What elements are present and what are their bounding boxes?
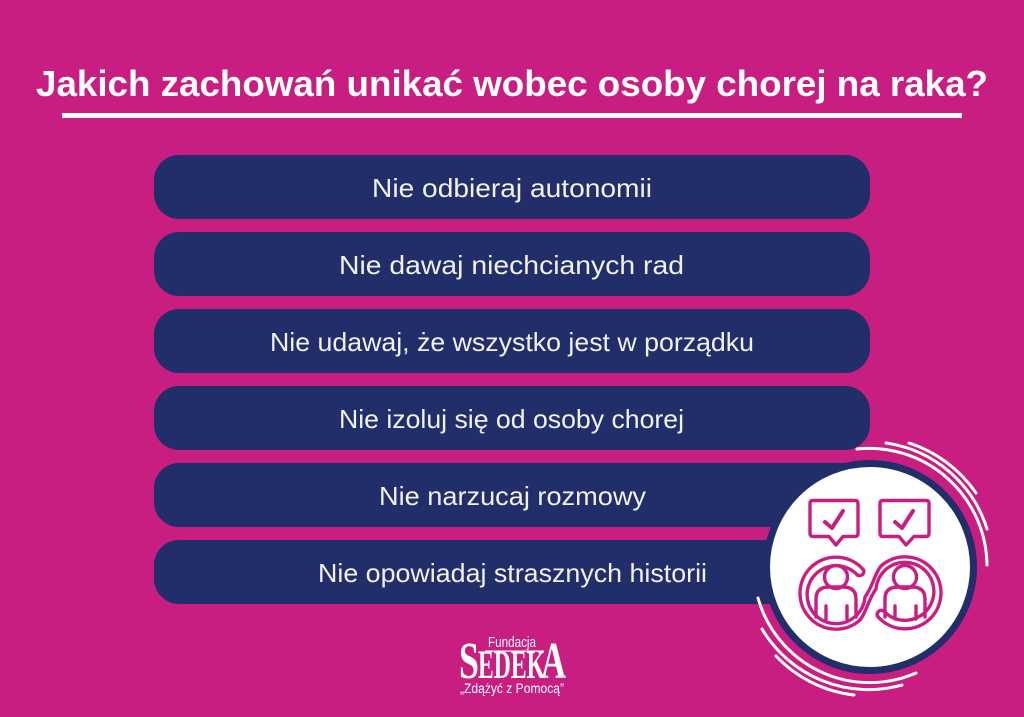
list item 1: Nie odbieraj autonomii [372, 173, 652, 203]
logo: Fundacja Sedeka: S [459, 633, 479, 690]
icon: right person [885, 566, 925, 619]
list item 3 [154, 309, 870, 373]
list item 1 [154, 155, 870, 219]
decorative swoosh arcs [758, 443, 987, 695]
icon badge circle [766, 464, 974, 670]
list item 5 [154, 463, 870, 527]
logo: Fundacja Sedeka: A [541, 633, 566, 690]
logo: Fundacja Sedeka: Fundacja [488, 634, 537, 651]
icon: two people with check speech bubbles [800, 500, 941, 629]
logo: Fundacja Sedeka: „Zdążyć z Pomocą” [460, 681, 564, 696]
logo: Fundacja Sedeka: EDEK [478, 642, 545, 687]
icon: left speech bubble [810, 500, 858, 545]
list item 6: Nie opowiadaj strasznych historii [318, 558, 707, 588]
icon: left person [816, 566, 856, 619]
logo: Fundacja Sedeka [459, 633, 566, 696]
list item 4 [154, 386, 870, 450]
title underline [62, 113, 962, 118]
list item 3: Nie udawaj, że wszystko jest w porządku [270, 327, 754, 357]
list item 2: Nie dawaj niechcianych rad [339, 250, 684, 280]
icon: right speech bubble [880, 500, 929, 545]
icon: infinity loop [800, 557, 941, 629]
list item 5: Nie narzucaj rozmowy [379, 481, 646, 511]
list item 4: Nie izoluj się od osoby chorej [339, 404, 684, 434]
list item 2 [154, 232, 870, 296]
list item 6 [154, 540, 870, 604]
title: Jakich zachowań unikać wobec osoby chorej na raka? [36, 63, 988, 104]
